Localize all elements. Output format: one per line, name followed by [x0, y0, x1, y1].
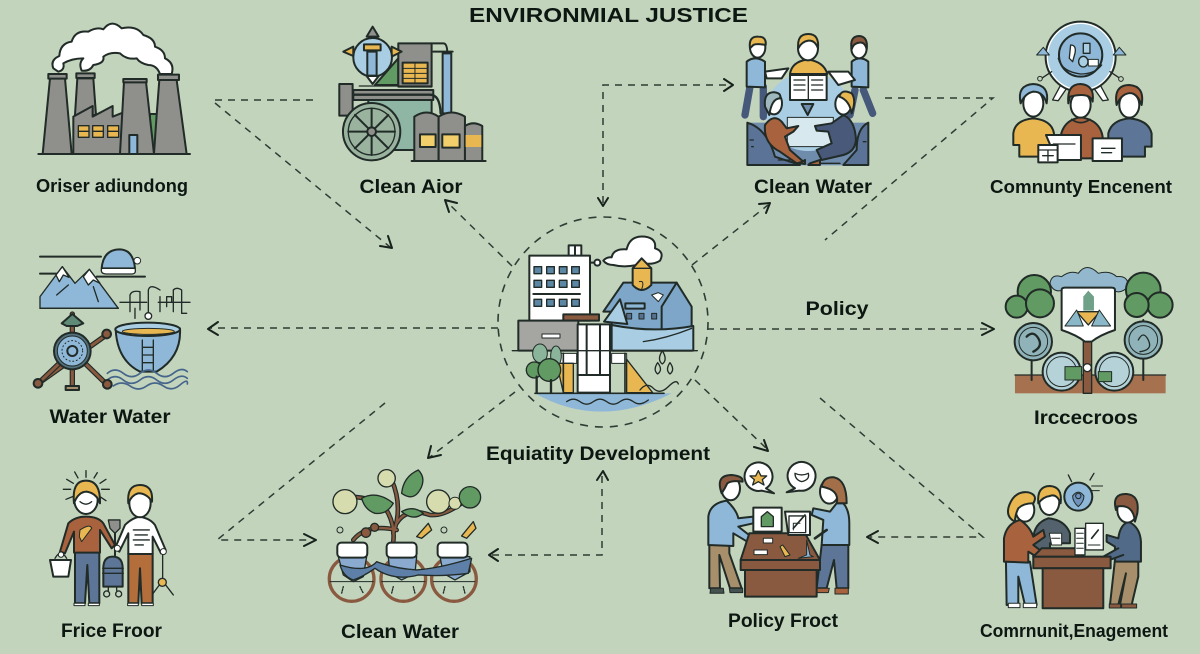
icon: two people reviewing policy at a desk	[708, 462, 849, 597]
icon: tree on water bicycle	[329, 470, 481, 601]
label: Clean Aior: Clean Aior	[360, 177, 463, 198]
label: Comnunty Encenent: Comnunty Encenent	[990, 177, 1172, 197]
icon: community group with globe	[1013, 22, 1152, 162]
label: Equiatity Development: Equiatity Development	[486, 444, 711, 465]
title: ENVIRONMIAL JUSTICE	[469, 5, 748, 27]
central circle: equitable development	[498, 217, 708, 427]
dashed connector arrows	[208, 79, 994, 561]
label: Clean Water (top): Clean Water	[754, 177, 873, 198]
icon: clean air machine	[339, 27, 486, 161]
label: Policy Froct: Policy Froct	[728, 611, 839, 632]
label: Water Water: Water Water	[50, 407, 171, 428]
icon: community engagement at a desk	[1004, 473, 1141, 608]
icon: people meeting around a table	[745, 34, 873, 165]
icon: water mountains, wheel and basin	[34, 249, 190, 390]
label: Clean Water (bottom): Clean Water	[341, 622, 460, 643]
label: Frice Froor: Frice Froor	[61, 621, 163, 642]
label: Oriser adiundong: Oriser adiundong	[36, 176, 188, 196]
icon: two volunteers with bucket and stroller	[50, 471, 173, 606]
label: Irccecroos: Irccecroos	[1034, 408, 1138, 429]
label: Comrnunit,Enagement: Comrnunit,Enagement	[980, 621, 1168, 641]
label: Policy: Policy	[806, 299, 869, 320]
icon: city, river and house	[512, 236, 697, 412]
icon: smokestack factory	[38, 24, 190, 154]
icon: conservation trees with policy shield	[1006, 267, 1173, 393]
